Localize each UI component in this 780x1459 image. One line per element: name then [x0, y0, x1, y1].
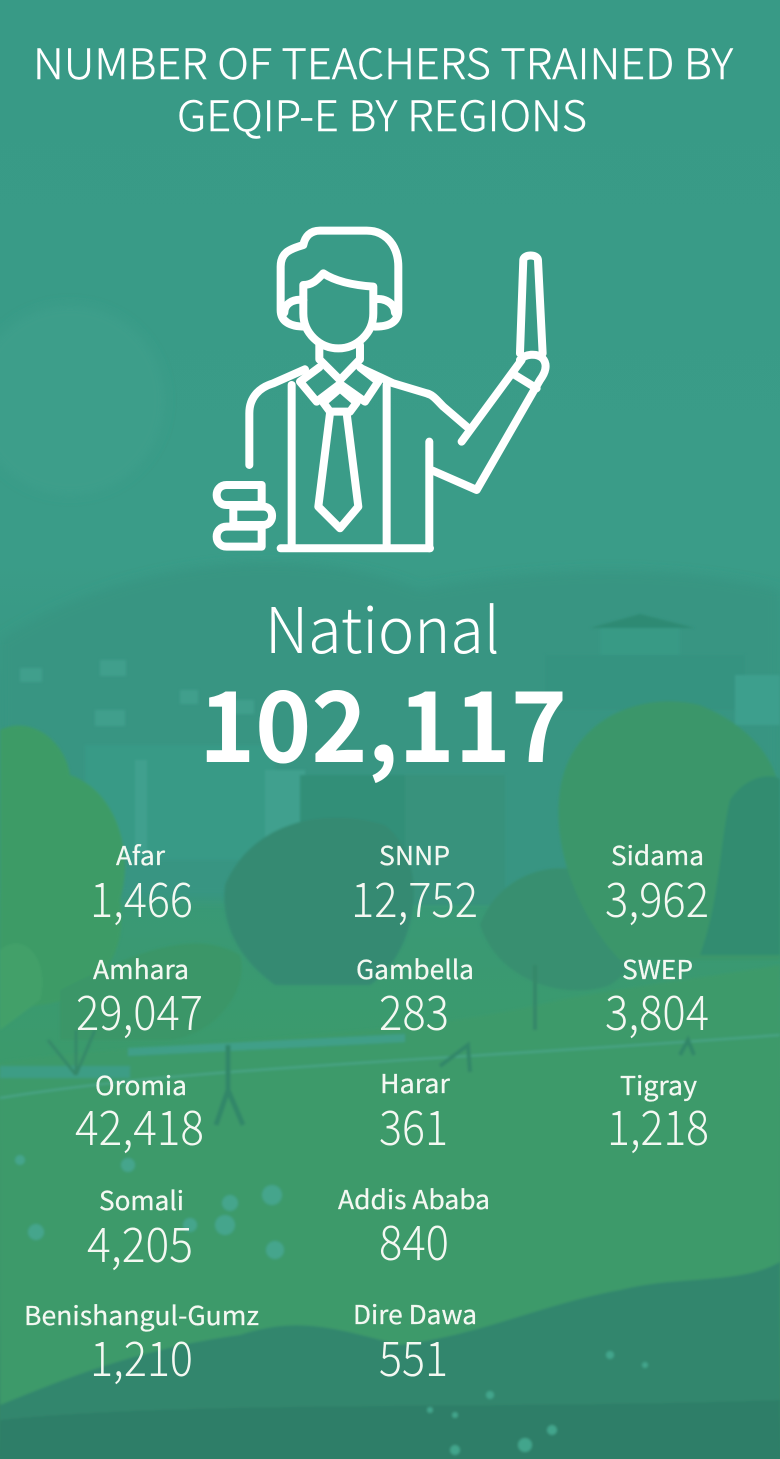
Tigray: 1,218	[607, 1089, 709, 1159]
Afar	[90, 836, 193, 931]
Somali: Somali	[99, 1181, 184, 1218]
title: GEQIP-E BY REGIONS	[177, 83, 587, 144]
Dire Dawa: 551	[379, 1320, 448, 1390]
Somali: 4,205	[87, 1206, 193, 1276]
SNNP: SNNP	[379, 836, 450, 873]
Addis Ababa	[338, 1180, 490, 1274]
Harar: Harar	[380, 1064, 451, 1101]
Dire Dawa: Dire Dawa	[353, 1295, 477, 1332]
title	[33, 31, 733, 144]
Amhara: Amhara	[93, 950, 189, 987]
title: NUMBER OF TEACHERS TRAINED BY	[33, 31, 733, 92]
SNNP: 12,752	[351, 861, 478, 931]
SWEP	[605, 950, 709, 1044]
Sidama	[605, 836, 709, 931]
Gambella: 283	[379, 974, 449, 1044]
Oromia: 42,418	[75, 1089, 204, 1159]
Amhara	[76, 950, 203, 1044]
national label: National	[265, 581, 500, 672]
Sidama: 3,962	[605, 861, 709, 931]
Afar: Afar	[116, 836, 166, 873]
Sidama: Sidama	[611, 836, 704, 873]
Benishangul-Gumz	[24, 1296, 259, 1390]
Oromia: Oromia	[95, 1066, 187, 1103]
Dire Dawa	[353, 1295, 477, 1390]
Tigray: Tigray	[620, 1066, 697, 1103]
Benishangul-Gumz: Benishangul-Gumz	[24, 1296, 259, 1333]
SWEP: SWEP	[622, 950, 693, 987]
Somali	[87, 1181, 193, 1276]
Harar: 361	[379, 1089, 448, 1159]
Amhara: 29,047	[76, 974, 203, 1044]
SNNP	[351, 836, 478, 931]
icon: teacher holding a pointer and books	[217, 231, 546, 548]
region figures	[24, 836, 709, 1390]
Gambella	[356, 950, 474, 1044]
Benishangul-Gumz: 1,210	[90, 1320, 193, 1390]
Addis Ababa: Addis Ababa	[338, 1180, 490, 1217]
SWEP: 3,804	[605, 974, 709, 1044]
Tigray	[607, 1066, 709, 1159]
Addis Ababa: 840	[379, 1204, 449, 1274]
Gambella: Gambella	[356, 950, 474, 987]
national total: 102,117	[199, 649, 567, 791]
Afar: 1,466	[90, 861, 193, 931]
